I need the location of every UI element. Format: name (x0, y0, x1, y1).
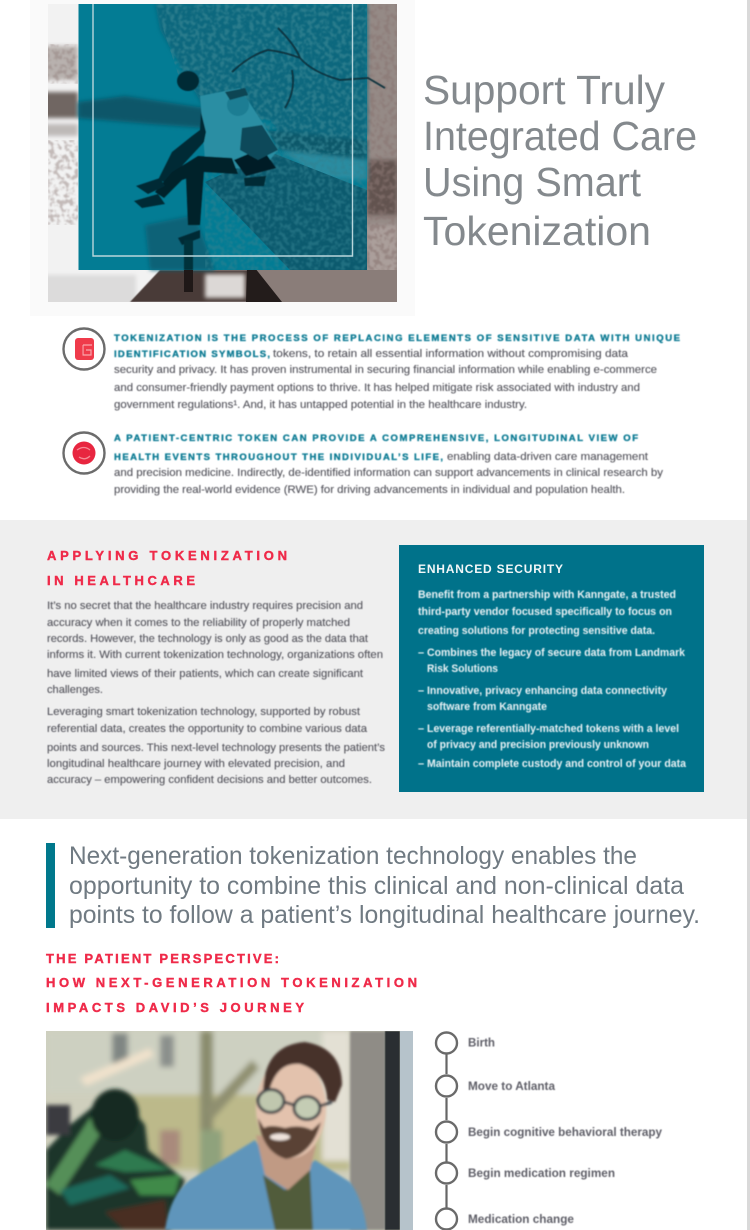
text block: applying tokenization body: referential data, creates the opportunity to combine various data (47, 723, 368, 735)
text block: enhanced security body: of privacy and precision previously unknown (427, 739, 649, 751)
hero photo: couple on a boardwalk with teal overlay (48, 4, 397, 302)
callout: next-generation tokenization quote: opportunity to combine this clinical and non-clinical data (69, 872, 684, 900)
bare tree branch (232, 28, 385, 108)
event: birth: Birth (468, 1038, 495, 1050)
text block: patient-centric token: enabling data-driven care management (447, 451, 648, 463)
text block: enhanced security body: – (418, 723, 424, 735)
text block: enhanced security body: software from Kanngate (427, 701, 547, 713)
text block: tokenization definition: and consumer-friendly payment options to thrive. It has helped mitigate risk associated with industry and (114, 382, 640, 394)
icon: patient token (64, 432, 104, 474)
text block: applying tokenization body: Leveraging smart tokenization technology, supported by robust (47, 706, 360, 718)
heading: applying tokenization in healthcare: APPLYING TOKENIZATION (47, 548, 287, 563)
text block: applying tokenization body: informs it. With current tokenization technology, organizations often (47, 649, 383, 661)
text block: applying tokenization body: It’s no secret that the healthcare industry requires precision and (47, 600, 363, 612)
timeline: David's journey (436, 1032, 663, 1230)
heading: the patient perspective: IMPACTS DAVID’S JOURNEY (46, 1000, 304, 1015)
event: move to Atlanta: Move to Atlanta (468, 1081, 556, 1093)
text block: patient-centric token: A PATIENT-CENTRIC TOKEN CAN PROVIDE A COMPREHENSIVE, LONGITUDINAL VIEW OF (114, 433, 638, 444)
heading: the patient perspective (46, 951, 417, 1015)
text block: applying tokenization body: points and sources. This next-level technology presents the patient’s (47, 742, 385, 754)
text block: patient-centric token (114, 433, 664, 496)
text block: enhanced security body: Leverage referentially-matched tokens with a level (427, 723, 679, 735)
text block: enhanced security body: – (418, 758, 424, 770)
text block: tokenization definition: security and privacy. It has proven instrumental in securing financial information while enabling e-commerce (114, 364, 657, 376)
text block: enhanced security body: Benefit from a partnership with Kanngate, a trusted (418, 589, 676, 601)
text block: enhanced security body: creating solutions for protecting sensitive data. (418, 625, 655, 637)
heading: the patient perspective: THE PATIENT PERSPECTIVE: (46, 951, 279, 966)
title: Support Truly (423, 67, 665, 113)
text block: tokenization definition (114, 333, 680, 411)
heading: the patient perspective: HOW NEXT-GENERATION TOKENIZATION (46, 975, 417, 990)
text block: enhanced security body: Maintain complete custody and control of your data (427, 758, 687, 770)
text block: patient-centric token: providing the real-world evidence (RWE) for driving advancements in individual and population health. (114, 484, 625, 496)
text block: enhanced security body: Combines the legacy of secure data from Landmark (427, 647, 686, 659)
panel: applying tokenization band (0, 520, 747, 819)
text block: applying tokenization body: longitudinal healthcare journey with elevated precision, and (47, 758, 345, 770)
text block: applying tokenization body: accuracy when it comes to the reliability of properly matched (47, 617, 350, 629)
panel: enhanced security (399, 545, 704, 792)
callout: next-generation tokenization quote: points to follow a patient’s longitudinal healthcare journey. (69, 901, 700, 929)
event: medication change: Medication change (468, 1214, 574, 1226)
title: Integrated Care (423, 113, 697, 159)
title: Using Smart (423, 159, 642, 205)
text block: tokenization definition: TOKENIZATION IS THE PROCESS OF REPLACING ELEMENTS OF SENSITIVE DATA WITH UNIQUE (114, 333, 680, 344)
couple silhouettes (134, 71, 278, 270)
event: begin medication regimen: Begin medication regimen (468, 1168, 615, 1180)
photo: David smiling (46, 1031, 413, 1230)
text block: enhanced security body: – (418, 685, 424, 697)
event: birth (436, 1032, 495, 1054)
title: Tokenization (423, 208, 651, 254)
event: medication change (436, 1208, 574, 1230)
heading: applying tokenization in healthcare (47, 548, 287, 588)
event: begin cognitive behavioral therapy (436, 1122, 663, 1142)
heading: enhanced security: ENHANCED SECURITY (418, 562, 563, 576)
text block: enhanced security body: – (418, 647, 424, 659)
man (165, 1042, 367, 1230)
text block: applying tokenization body: challenges. (47, 684, 103, 696)
event: begin cognitive behavioral therapy: Begin cognitive behavioral therapy (468, 1127, 663, 1139)
text block: patient-centric token: HEALTH EVENTS THROUGHOUT THE INDIVIDUAL’S LIFE, (114, 452, 443, 463)
text block: patient-centric token: and precision medicine. Indirectly, de-identified information can support advancements in clinical research by (114, 467, 664, 479)
text block: tokenization definition: IDENTIFICATION SYMBOLS, (114, 349, 270, 360)
text block: enhanced security body: Innovative, privacy enhancing data connectivity (427, 685, 668, 697)
event: move to Atlanta (436, 1076, 556, 1096)
callout: next-generation tokenization quote (46, 842, 700, 929)
text block: tokenization definition: government regulations¹. And, it has untapped potential in the healthcare industry. (114, 399, 527, 411)
heading: applying tokenization in healthcare: IN HEALTHCARE (47, 573, 195, 588)
text block: applying tokenization body: records. However, the technology is only as good as the data that (47, 633, 368, 645)
title (423, 67, 697, 254)
icon: token document (64, 328, 104, 370)
text block: applying tokenization body: have limited views of their patients, which can create significant (47, 668, 363, 680)
text block: tokenization definition: tokens, to retain all essential information without compromising data (273, 348, 629, 360)
callout: next-generation tokenization quote: Next-generation tokenization technology enables the (69, 842, 637, 870)
text block: enhanced security body (418, 589, 687, 770)
text block: applying tokenization body: accuracy – empowering confident decisions and better outcomes. (47, 774, 372, 786)
text block: enhanced security body: Risk Solutions (427, 663, 498, 675)
event: begin medication regimen (436, 1162, 615, 1184)
text block: applying tokenization body (47, 600, 385, 786)
text block: enhanced security body: third-party vendor focused specifically to focus on (418, 606, 672, 618)
